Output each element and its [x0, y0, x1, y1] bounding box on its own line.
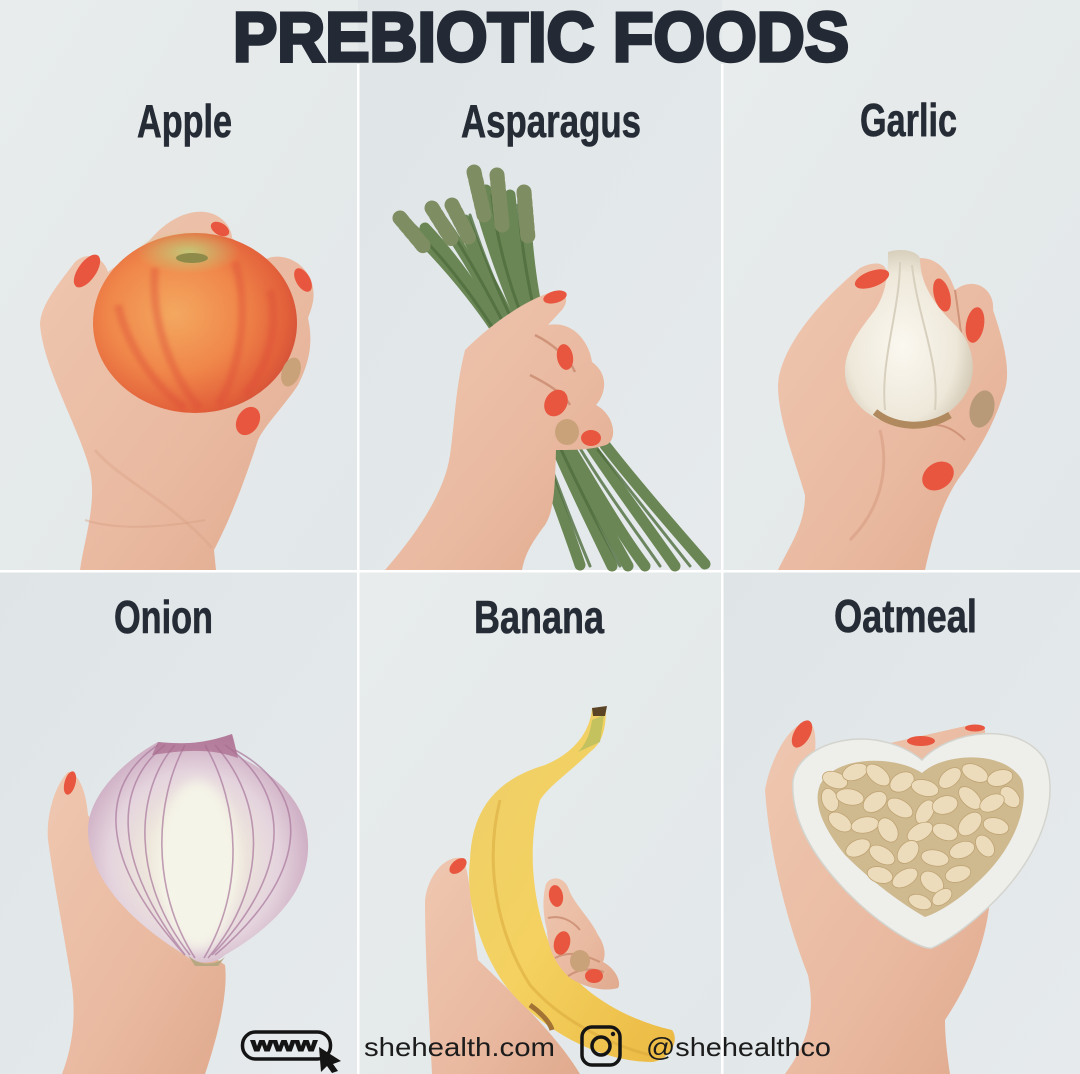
icon: nails [69, 219, 316, 439]
icon: oats [818, 760, 1024, 913]
heading: Onion: Onion [114, 591, 213, 643]
icon: garlic bulb [845, 250, 973, 425]
panel: banana [425, 591, 675, 1074]
footer [242, 1027, 831, 1073]
title: PREBIOTIC FOODS [233, 0, 849, 76]
icon: hand holding banana (back) [425, 858, 580, 1074]
icon: apple [93, 230, 297, 413]
panel: oatmeal [765, 590, 1050, 1074]
website: shehealth.com [364, 1032, 555, 1062]
icon: banana [469, 706, 675, 1062]
icon: nails [852, 265, 999, 496]
icon: www cursor: www [250, 1035, 317, 1056]
heading: Oatmeal: Oatmeal [834, 590, 977, 642]
icon: nail [62, 770, 78, 796]
heading: Banana: Banana [474, 591, 604, 643]
heading: Asparagus: Asparagus [461, 95, 641, 147]
heading: Apple: Apple [137, 95, 232, 147]
icon: instagram [582, 1027, 620, 1065]
icon: nails [788, 717, 985, 751]
icon: hand holding apple [40, 212, 314, 570]
instagram handle: @shehealthco [646, 1032, 831, 1062]
panel: onion [48, 591, 308, 1074]
icon: nails [539, 288, 601, 446]
icon: www cursor [242, 1032, 341, 1073]
icon: asparagus bunch [400, 172, 705, 566]
icon: fingers [543, 878, 619, 990]
panel: asparagus [385, 95, 705, 570]
icon: nails [446, 855, 603, 983]
heading: Garlic: Garlic [860, 94, 957, 146]
icon: hand holding bowl [765, 722, 990, 1074]
panel: garlic [778, 94, 1007, 570]
panel: apple [40, 95, 316, 570]
icon: hand holding asparagus [385, 292, 613, 570]
icon: onion half [88, 734, 308, 966]
icon: heart bowl [793, 734, 1050, 948]
icon: hand holding garlic [778, 258, 1007, 570]
icon: hand holding onion [48, 772, 226, 1074]
